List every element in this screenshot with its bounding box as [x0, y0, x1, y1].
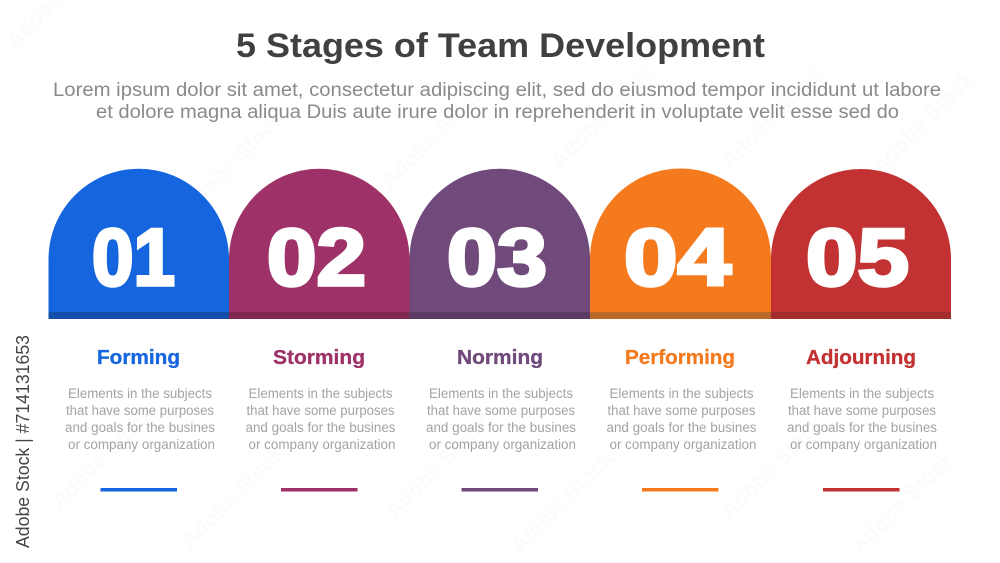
description: or company organization	[429, 437, 576, 452]
text: Adobe Stock	[176, 105, 289, 219]
description: and goals for the busines	[606, 420, 757, 435]
subtitle text block: Lorem ipsum dolor sit amet, consectetur adipiscing elit, sed do eiusmod tempor incididunt ut labore	[53, 80, 941, 101]
description: or company organization	[610, 437, 756, 452]
heading Storming: Storming	[273, 347, 365, 369]
heading Adjourning: Adjourning	[806, 347, 916, 369]
description: or company organization	[68, 437, 215, 452]
arch 03	[410, 169, 590, 319]
text: Adobe Stock	[506, 445, 619, 559]
description: or company organization	[248, 437, 396, 452]
description	[426, 386, 576, 452]
panel: stage 02 Storming	[229, 169, 410, 492]
description	[65, 386, 215, 452]
text: Adobe Stock	[866, 65, 979, 179]
subtitle text block: et dolore magna aliqua Duis aute irure dolor in reprehenderit in voluptate velit esse sed do	[96, 102, 899, 123]
description	[246, 386, 396, 452]
text: Adobe Stock	[176, 440, 289, 554]
arch 04	[590, 169, 771, 319]
description: Elements in the subjects	[429, 386, 573, 401]
text: Adobe Stock	[716, 60, 829, 174]
panel: stage 01 Forming	[48, 169, 229, 492]
number 04: 04	[624, 213, 731, 303]
subtitle text block	[53, 80, 941, 123]
description: that have some purposes	[246, 403, 395, 418]
number 05: 05	[806, 213, 909, 303]
description: and goals for the busines	[426, 420, 576, 435]
underline	[642, 488, 718, 492]
arch 02	[229, 169, 410, 319]
description	[606, 386, 757, 452]
underline	[823, 488, 900, 492]
heading Performing: Performing	[625, 347, 735, 369]
panel: stage 05 Adjourning	[771, 169, 951, 492]
arch 01	[48, 169, 229, 319]
title: 5 Stages of Team Development	[236, 27, 765, 65]
description: that have some purposes	[608, 403, 756, 418]
arch 05	[771, 169, 951, 319]
number 02: 02	[267, 213, 366, 303]
text: Adobe Stock	[46, 400, 159, 514]
underline	[462, 488, 538, 492]
description: and goals for the busines	[246, 420, 396, 435]
description: that have some purposes	[427, 403, 575, 418]
text: Adobe Stock	[381, 410, 494, 524]
number 03: 03	[447, 213, 547, 303]
text: Adobe Stock	[546, 60, 659, 174]
text: Adobe Stock	[846, 445, 959, 559]
description: and goals for the busines	[787, 420, 937, 435]
description: Elements in the subjects	[610, 386, 754, 401]
heading Forming: Forming	[97, 347, 180, 369]
number 01: 01	[92, 213, 175, 303]
description: Elements in the subjects	[248, 386, 393, 401]
text: Adobe Stock	[716, 410, 829, 524]
description: that have some purposes	[788, 403, 936, 418]
panel: stage 03 Norming	[410, 169, 590, 492]
text: Adobe Stock	[376, 80, 489, 194]
description	[787, 386, 937, 452]
underline	[281, 488, 358, 492]
description: Elements in the subjects	[790, 386, 934, 401]
description: Elements in the subjects	[68, 386, 212, 401]
panel: stage 04 Performing	[590, 169, 771, 492]
stock credit vertical text: Adobe Stock | #714131653	[12, 335, 33, 548]
heading Norming: Norming	[457, 347, 543, 369]
description: or company organization	[790, 437, 937, 452]
description: and goals for the busines	[65, 420, 215, 435]
description: that have some purposes	[66, 403, 214, 418]
underline	[100, 488, 177, 492]
